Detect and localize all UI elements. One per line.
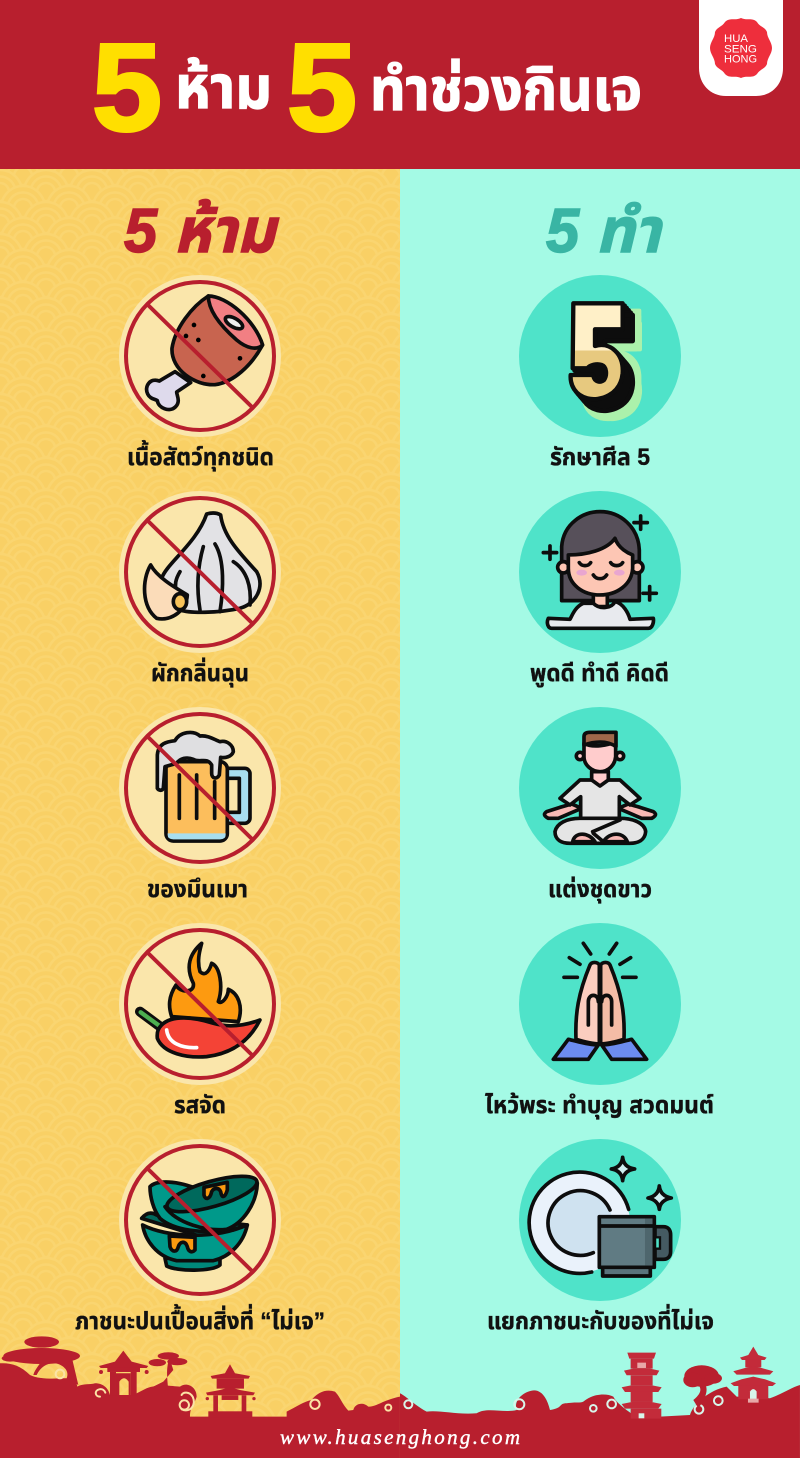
label: contaminated dishes: ภาชนะปนเปื้อนสิ่งที่ “ไม่เจ” bbox=[75, 1304, 325, 1335]
item: dress in white bbox=[519, 707, 681, 869]
label: strong flavours: รสจัด bbox=[174, 1092, 226, 1119]
item: alcohol bbox=[119, 707, 281, 869]
label: intoxicants: ของมึนเมา bbox=[147, 875, 248, 903]
heading: 5 ทำ: 5 ทำ bbox=[546, 197, 663, 266]
panel: 5 things to do bbox=[400, 169, 800, 1458]
label: dress in white: แต่งชุดขาว bbox=[548, 875, 652, 904]
item: pray bbox=[519, 923, 681, 1085]
label: speak good, do good, think good: พูดดี ทำดี คิดดี bbox=[530, 660, 669, 688]
icon: meat drumstick bbox=[147, 296, 263, 410]
icon: plate and mug bbox=[529, 1157, 671, 1276]
label: separate dishes and non-vegan items: แยกภาชนะกับของที่ไม่เจ bbox=[487, 1304, 714, 1335]
logo: Hua Seng Hong: SENG bbox=[724, 44, 757, 56]
logo: Hua Seng Hong bbox=[699, 0, 783, 96]
item: spicy food bbox=[119, 923, 281, 1085]
item: separate dishes bbox=[519, 1139, 681, 1301]
website address: www.huasenghong.com bbox=[280, 1425, 520, 1449]
item: contaminated dishes bbox=[119, 1139, 281, 1301]
label: strong-smelling vegetables: ผักกลิ่นฉุน bbox=[151, 657, 249, 688]
title: 5 ห้าม 5 ทำช่วงกินเจ: 5 bbox=[92, 20, 162, 158]
footer skyline right bbox=[400, 1347, 800, 1458]
icon: meditating girl bbox=[543, 512, 656, 628]
item: speak good bbox=[519, 491, 681, 653]
heading: 5 ห้าม: 5 ห้าม bbox=[124, 197, 280, 266]
icon: garlic bbox=[145, 513, 260, 619]
title: 5 ห้าม 5 ทำช่วงกินเจ: ทำช่วงกินเจ bbox=[370, 56, 642, 123]
logo: Hua Seng Hong: HONG bbox=[724, 54, 757, 66]
title: 5 ห้าม 5 ทำช่วงกินเจ: 5 bbox=[287, 20, 357, 158]
panel: 5 prohibitions bbox=[0, 169, 400, 1458]
icon: praying hands bbox=[553, 943, 647, 1059]
footer skyline left bbox=[0, 1336, 400, 1458]
icon: number five bbox=[571, 303, 640, 419]
item: five precepts bbox=[519, 275, 681, 437]
item: garlic bbox=[119, 491, 281, 653]
icon: chili and flame bbox=[140, 943, 260, 1057]
logo: Hua Seng Hong: HUA bbox=[724, 33, 749, 45]
item: meat bbox=[119, 275, 281, 437]
icon: stacked bowls bbox=[142, 1169, 260, 1270]
label: worship, make merit, chant: ไหว้พระ ทำบุญ สวดมนต์ bbox=[485, 1091, 714, 1120]
title: 5 ห้าม 5 ทำช่วงกินเจ bbox=[92, 20, 642, 158]
title: 5 ห้าม 5 ทำช่วงกินเจ: ห้าม bbox=[175, 54, 272, 121]
header band bbox=[0, 0, 800, 169]
label: keep five precepts: รักษาศีล 5 bbox=[550, 444, 650, 471]
icon: beer mug bbox=[157, 732, 250, 841]
label: all meat: เนื้อสัตว์ทุกชนิด bbox=[127, 440, 274, 472]
icon: meditating man bbox=[545, 732, 655, 843]
